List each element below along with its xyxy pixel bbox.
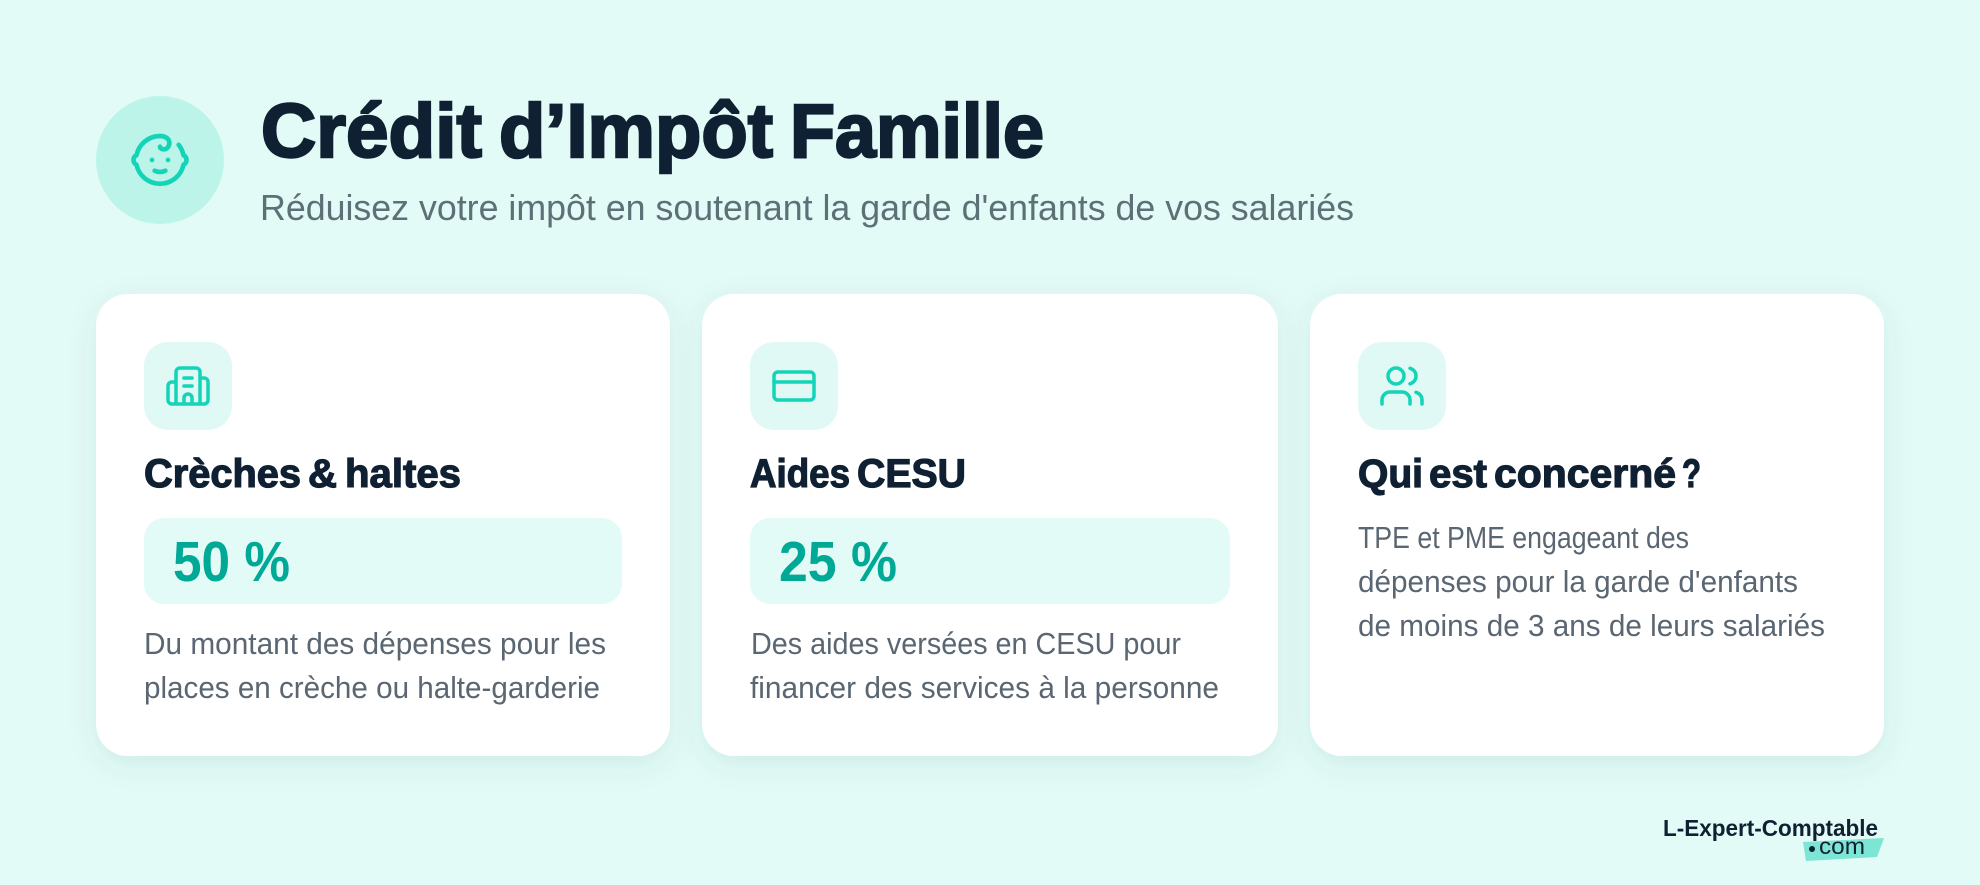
description: Du montant des dépenses pour les (144, 626, 606, 661)
title: d’Impôt (499, 89, 773, 174)
panel: qui est concerné (1310, 294, 1884, 756)
description (750, 626, 1219, 705)
description: places en crèche ou halte-garderie (144, 670, 600, 705)
description: Des aides versées en CESU pour (751, 626, 1181, 661)
heading: est (1429, 452, 1487, 496)
heading (750, 452, 966, 496)
stat: 25 %: 25 % (779, 530, 897, 594)
heading: concerné (1494, 452, 1676, 496)
panel: aides CESU (702, 294, 1278, 756)
logo: L-Expert-Comptable.com: L-Expert-Comptable (1663, 815, 1878, 841)
description (1358, 520, 1825, 643)
heading (144, 452, 461, 496)
icon: building (144, 342, 232, 430)
description: financer des services à la personne (750, 670, 1219, 705)
heading: Qui (1358, 452, 1423, 496)
heading: CESU (857, 452, 966, 496)
logo: L-Expert-Comptable.com: com (1819, 833, 1865, 859)
title (261, 89, 1044, 174)
heading: haltes (345, 452, 461, 496)
heading (1358, 452, 1701, 496)
description: de moins de 3 ans de leurs salariés (1358, 608, 1825, 643)
subtitle: Réduisez votre impôt en soutenant la garde d'enfants de vos salariés (260, 187, 1354, 228)
logo: L-Expert-Comptable.com (1663, 815, 1884, 861)
stat: 25 % (750, 518, 1230, 604)
stat: 50 % (144, 518, 622, 604)
icon: credit card (750, 342, 838, 430)
title: Famille (790, 89, 1044, 174)
heading: & (308, 452, 337, 496)
description: TPE et PME engageant des (1358, 520, 1689, 555)
description: dépenses pour la garde d'enfants (1358, 564, 1798, 599)
description (144, 626, 606, 705)
panel: crèches et haltes (96, 294, 670, 756)
title: Crédit (261, 89, 482, 174)
icon: baby face in circle (96, 96, 224, 224)
icon: users (1358, 342, 1446, 430)
heading: Crèches (144, 452, 301, 496)
heading: Aides (750, 452, 850, 496)
stat: 50 %: 50 % (173, 530, 290, 594)
heading: ? (1682, 452, 1701, 496)
